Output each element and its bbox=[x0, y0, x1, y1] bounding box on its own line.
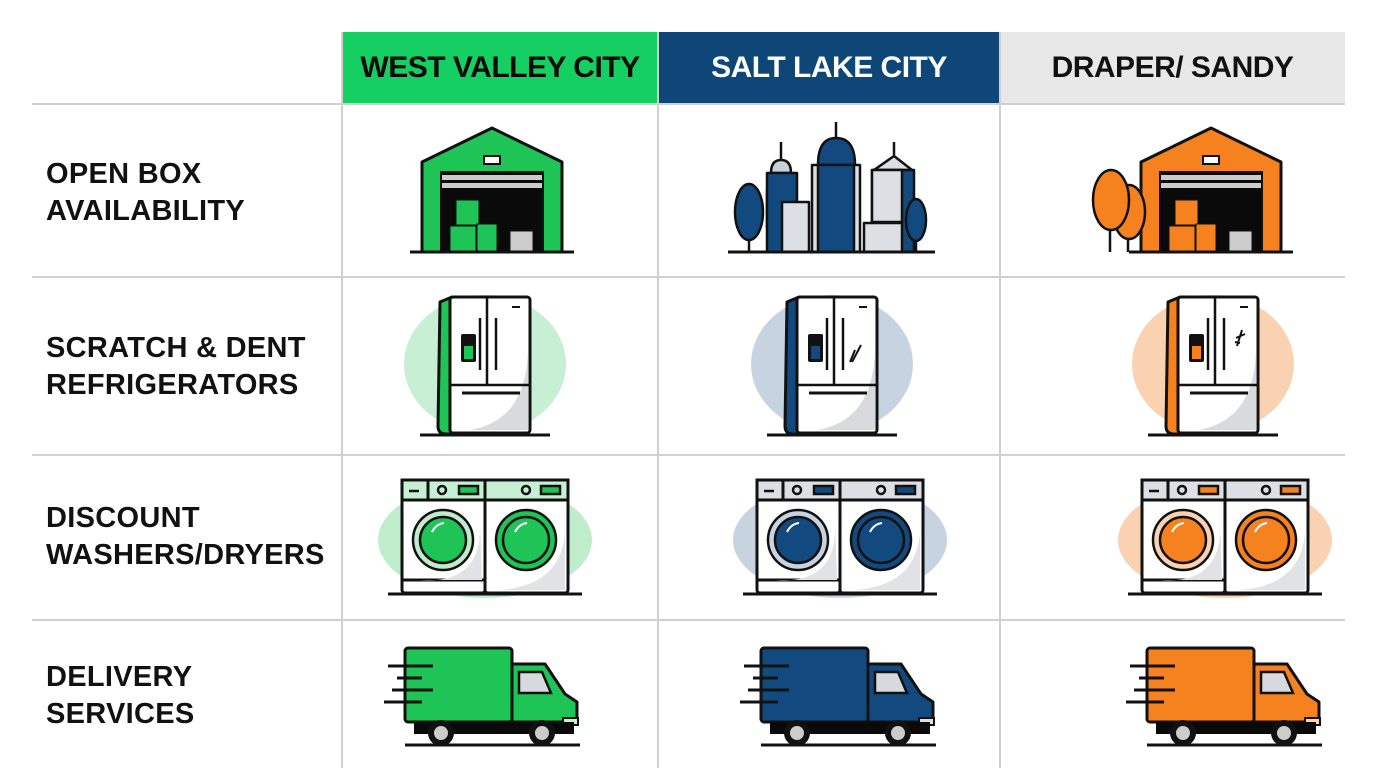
row label: delivery: SERVICES bbox=[46, 698, 195, 730]
icon: orange fridge dented bbox=[1132, 295, 1294, 435]
row label: discount washers bbox=[46, 502, 325, 571]
icon: navy city skyline bbox=[728, 122, 935, 252]
icon: green truck bbox=[384, 648, 580, 746]
header: Salt Lake City: SALT LAKE CITY bbox=[711, 51, 947, 84]
icon: green fridge bbox=[404, 295, 566, 435]
row label: open box: OPEN BOX bbox=[46, 158, 202, 190]
header: Salt Lake City bbox=[658, 32, 1000, 104]
icon: green washers bbox=[378, 480, 592, 598]
row label: scratch & dent: REFRIGERATORS bbox=[46, 369, 299, 401]
icon: navy fridge scratched bbox=[751, 295, 913, 435]
icon: green warehouse bbox=[410, 128, 574, 252]
icon: navy truck bbox=[740, 648, 936, 746]
icon: orange washers bbox=[1118, 480, 1332, 598]
icon: orange warehouse with trees bbox=[1093, 128, 1293, 252]
header: Draper/Sandy: DRAPER/ SANDY bbox=[1052, 51, 1293, 84]
header: West Valley City: WEST VALLEY CITY bbox=[360, 51, 640, 84]
row label: discount washers: WASHERS/DRYERS bbox=[46, 539, 325, 571]
row label: delivery: DELIVERY bbox=[46, 661, 192, 693]
header: Draper/Sandy bbox=[1000, 32, 1345, 104]
header: West Valley City bbox=[342, 32, 658, 104]
row label: scratch & dent: SCRATCH & DENT bbox=[46, 332, 306, 364]
icon: orange truck bbox=[1126, 648, 1322, 746]
row label: scratch & dent bbox=[46, 332, 306, 401]
row label: open box bbox=[46, 158, 245, 227]
row label: discount washers: DISCOUNT bbox=[46, 502, 200, 534]
row label: open box: AVAILABILITY bbox=[46, 195, 245, 227]
icon: navy washers bbox=[733, 480, 947, 598]
row label: delivery bbox=[46, 661, 195, 730]
